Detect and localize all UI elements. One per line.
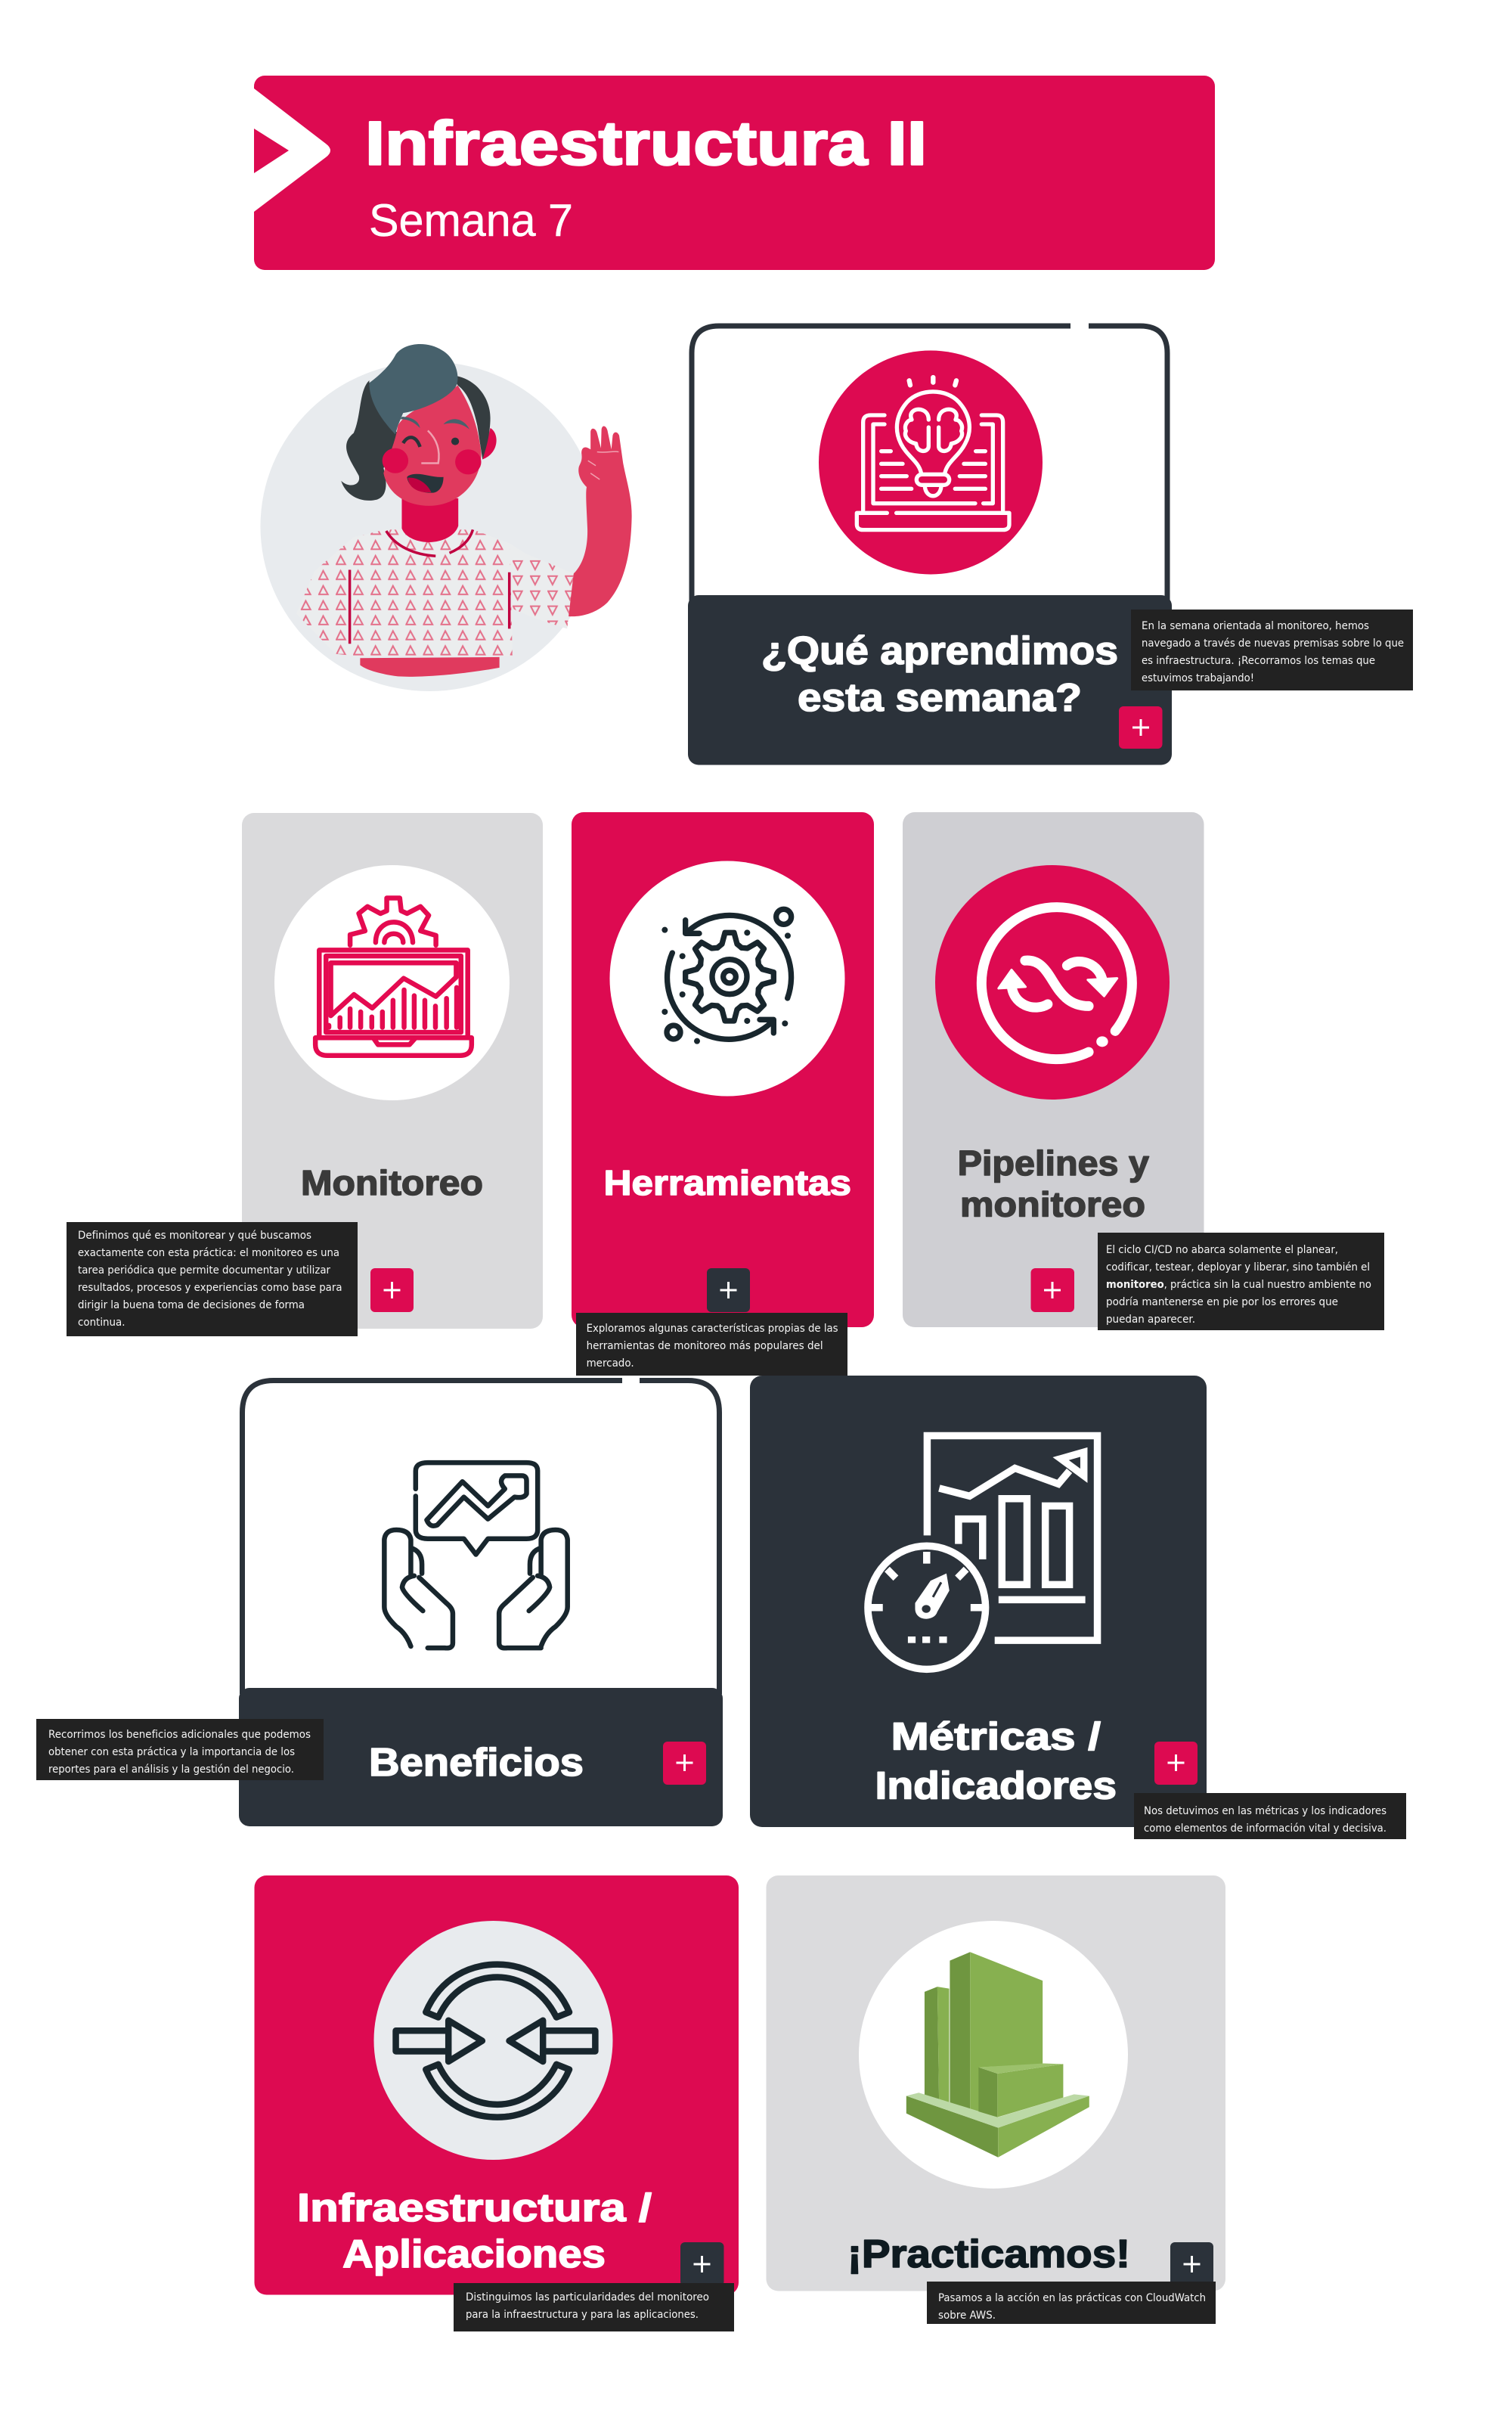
button: plus [663, 1742, 706, 1785]
tooltip: como elementos de información vital y decisiva. [1144, 1823, 1387, 1835]
tooltip [1098, 1233, 1384, 1330]
header banner [254, 76, 1215, 270]
tooltip: estuvimos trabajando! [1142, 672, 1254, 684]
icon: brain bulb on laptop [819, 351, 1043, 575]
tooltip: Pasamos a la acción en las prácticas con CloudWatch [938, 2292, 1206, 2304]
tooltip: puedan aparecer. [1106, 1314, 1195, 1326]
tooltip [36, 1719, 324, 1780]
heading: Herramientas [603, 1163, 851, 1202]
subtitle: Semana 7 [369, 195, 573, 246]
panel: Métricas / Indicadores [750, 1376, 1406, 1839]
panel: Pipelines y monitoreo [903, 812, 1384, 1330]
heading: monitoreo [960, 1184, 1145, 1224]
heading: ¿Qué aprendimos [761, 629, 1118, 673]
tooltip: es infraestructura. ¡Recorramos los temas que [1142, 655, 1375, 667]
tooltip: resultados, procesos y experiencias como base para [78, 1282, 342, 1294]
heading: esta semana? [798, 676, 1082, 720]
heading: Beneficios [369, 1741, 584, 1785]
tooltip: tarea periódica que permite documentar y utilizar [78, 1264, 330, 1277]
panel: Herramientas [572, 812, 874, 1376]
tooltip: El ciclo CI/CD no abarca solamente el planear, [1106, 1244, 1338, 1256]
button: plus [1119, 706, 1163, 749]
tooltip: codificar, testear, deployar y liberar, sino también el [1106, 1261, 1370, 1273]
tooltip: podría mantenerse en pie por los errores que [1106, 1296, 1338, 1308]
panel: ¡Practicamos! [767, 1875, 1225, 2324]
icon: header chevron [254, 88, 330, 212]
tooltip [927, 2282, 1216, 2324]
icon: gear cycle [609, 861, 845, 1097]
tooltip: Exploramos algunas características propias de las [587, 1323, 838, 1335]
heading: ¡Practicamos! [847, 2232, 1130, 2276]
tooltip: dirigir la buena toma de decisiones de forma [78, 1299, 305, 1311]
tooltip [1134, 1793, 1406, 1839]
panel: ¿Qué aprendimos esta semana? [688, 326, 1413, 765]
tooltip: herramientas de monitoreo más populares del [587, 1340, 823, 1352]
heading: Infraestructura / [297, 2186, 652, 2230]
tooltip: monitoreo, práctica sin la cual nuestro ambiente no [1106, 1279, 1371, 1291]
heading [958, 1143, 1149, 1224]
tooltip [1131, 610, 1413, 690]
button: plus [1154, 1742, 1198, 1785]
icon: hands holding chart [384, 1463, 568, 1648]
icon: converging arrows [373, 1921, 612, 2160]
tooltip [576, 1313, 847, 1376]
tooltip: navegado a través de nuevas premisas sobre lo que [1142, 638, 1404, 650]
heading [761, 629, 1118, 720]
heading [297, 2186, 652, 2276]
tooltip: sobre AWS. [938, 2310, 996, 2322]
button: plus [707, 1268, 750, 1312]
button: plus [370, 1268, 414, 1312]
icon: laptop chart with gear [274, 865, 510, 1100]
panel: Beneficios [36, 1381, 723, 1826]
tooltip: mercado. [587, 1357, 634, 1370]
tooltip: reportes para el análisis y la gestión del negocio. [48, 1764, 294, 1776]
tooltip [454, 2283, 734, 2331]
illustration: waving character [260, 344, 632, 691]
tooltip [67, 1222, 358, 1336]
tooltip: continua. [78, 1317, 125, 1329]
tooltip: para la infraestructura y para las aplicaciones. [466, 2309, 699, 2321]
panel: Infraestructura / Aplicaciones [254, 1875, 739, 2331]
button: plus [1031, 1268, 1074, 1312]
icon: CloudWatch buildings [859, 1921, 1128, 2189]
button: plus [680, 2242, 724, 2286]
heading: Monitoreo [301, 1163, 483, 1202]
heading: Pipelines y [958, 1143, 1149, 1183]
tooltip: Nos detuvimos en las métricas y los indicadores [1144, 1805, 1387, 1817]
title: Infraestructura II [365, 109, 927, 178]
tooltip: En la semana orientada al monitoreo, hemos [1142, 620, 1369, 632]
tooltip: obtener con esta práctica y la importancia de los [48, 1746, 295, 1758]
tooltip: exactamente con esta práctica: el monitoreo es una [78, 1247, 339, 1259]
tooltip: Definimos qué es monitorear y qué buscamos [78, 1230, 311, 1242]
tooltip: Distinguimos las particularidades del monitoreo [466, 2291, 709, 2303]
icon: continuous loop [935, 865, 1170, 1100]
button: plus [1170, 2242, 1213, 2286]
heading: Métricas / [891, 1715, 1101, 1757]
icon: report and gauge [865, 1436, 1098, 1669]
panel: Monitoreo [67, 813, 543, 1336]
heading [875, 1715, 1117, 1807]
heading: Aplicaciones [342, 2232, 606, 2276]
heading: Indicadores [875, 1764, 1117, 1807]
tooltip: Recorrimos los beneficios adicionales que podemos [48, 1729, 311, 1741]
